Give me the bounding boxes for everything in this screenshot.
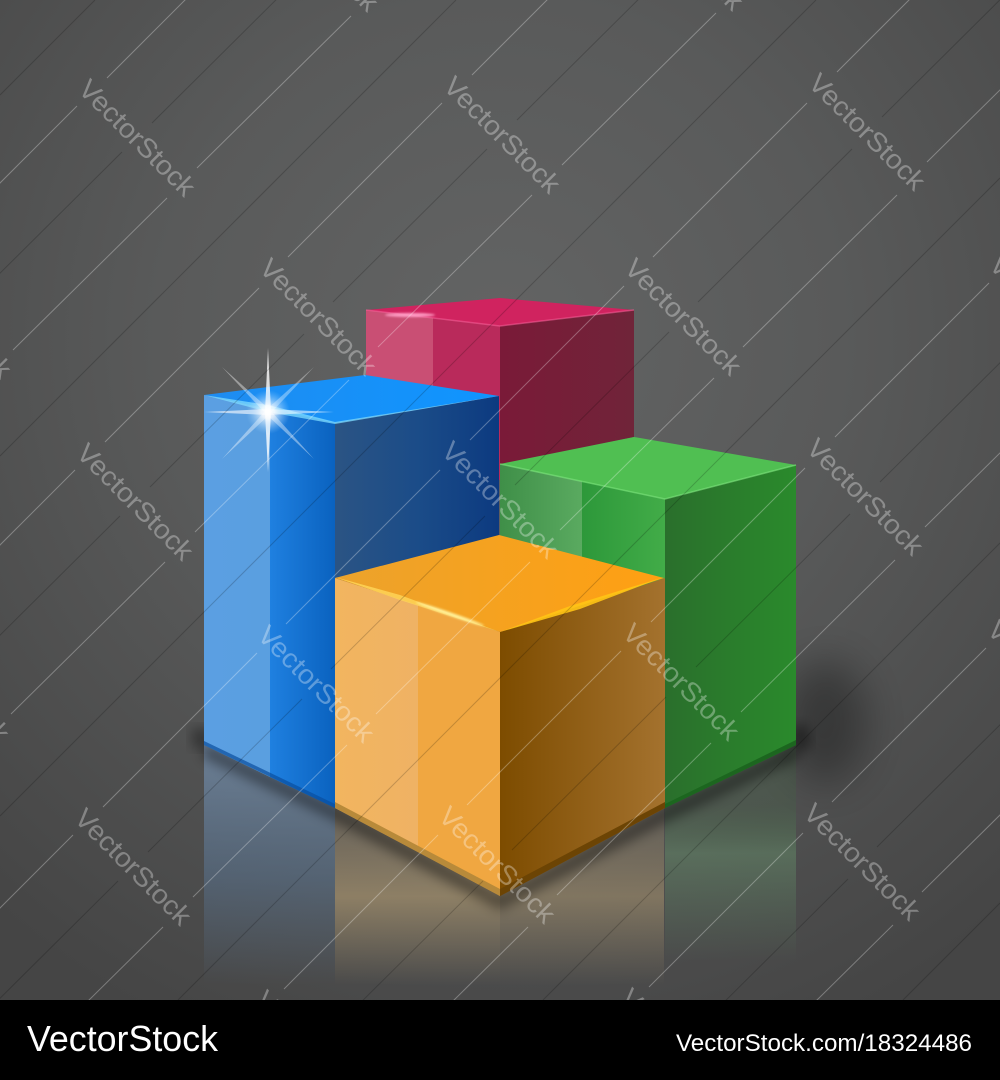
floor reflections: [204, 745, 796, 985]
footer bar: [0, 1000, 1000, 1080]
watermark text: VectorStock: [803, 68, 932, 197]
orange box: [335, 535, 665, 896]
footer logo: VectorStock: [27, 1018, 219, 1059]
icon: sparkle on blue box: [204, 348, 334, 472]
watermark text: VectorStock: [254, 253, 383, 382]
reflection: orange left: [335, 808, 500, 985]
reflection: green: [665, 745, 796, 985]
watermark text: V: [250, 985, 284, 1019]
contact shadow: [204, 750, 796, 902]
watermark text: VectorStock: [438, 71, 567, 200]
watermark text: V: [615, 983, 649, 1017]
footer url: VectorStock.com/18324486: [676, 1030, 972, 1057]
magenta box: [366, 298, 634, 480]
watermark text: VectorStock: [436, 436, 565, 565]
watermark text: VectorStock: [798, 798, 927, 927]
blue box: [204, 375, 499, 808]
watermark text: VectorStock: [252, 620, 381, 749]
watermark text: VectorStock: [619, 253, 748, 382]
cast shadow: [192, 660, 867, 784]
watermark text: VectorStock: [433, 801, 562, 930]
watermark text: VectorStock: [617, 618, 746, 747]
watermark text: VectorStock: [73, 74, 202, 203]
watermark text: VectorStock: [71, 438, 200, 567]
watermark text: VectorStock: [69, 803, 198, 932]
3D bar chart: [204, 298, 796, 896]
reflection: blue: [204, 745, 335, 985]
reflection: orange right: [500, 808, 664, 985]
watermark text: VectorStock: [801, 433, 930, 562]
green box: [500, 437, 796, 808]
